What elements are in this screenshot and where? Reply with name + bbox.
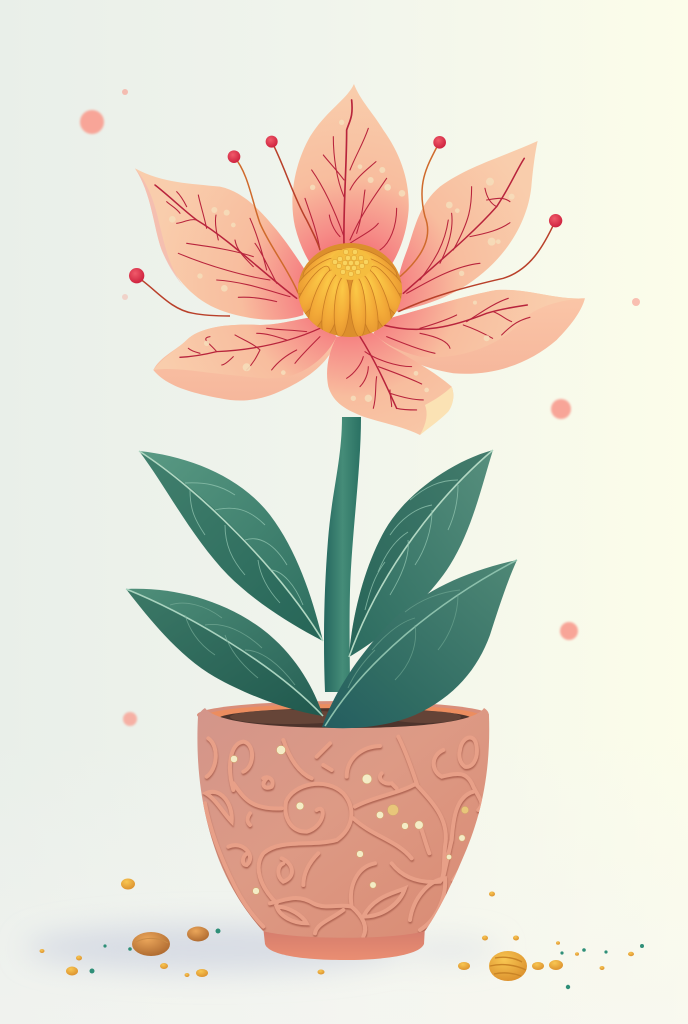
pot body (197, 708, 489, 938)
stamens (137, 142, 555, 316)
seed: gold crumbs (40, 878, 634, 977)
seed: green crumbs (90, 928, 644, 989)
pot rim and soil (197, 701, 489, 730)
petal: upper right (396, 141, 538, 312)
flower centre (298, 243, 402, 337)
petal: right (373, 290, 585, 374)
pot beads (230, 746, 469, 894)
leaf: upper left (139, 451, 323, 641)
stem (324, 417, 361, 692)
petal: top (292, 84, 409, 277)
petal: upper left (135, 168, 305, 320)
leaf: lower left (126, 589, 323, 716)
scattered seeds (40, 878, 644, 989)
seed: large brown (132, 932, 170, 956)
flower (129, 84, 585, 435)
seed: large gold striped (489, 951, 527, 981)
dew drops on petals (169, 120, 515, 402)
leaf: upper right (349, 450, 493, 657)
petal: lower center (327, 332, 453, 435)
floating pink spots (80, 89, 640, 726)
pot relief decoration (205, 737, 481, 937)
leaf: lower right (322, 560, 517, 728)
petal veins (155, 100, 530, 410)
seed: small brown (187, 926, 209, 942)
petal: lower left (153, 317, 337, 401)
floor shadow (25, 924, 500, 972)
pot base (263, 926, 425, 960)
